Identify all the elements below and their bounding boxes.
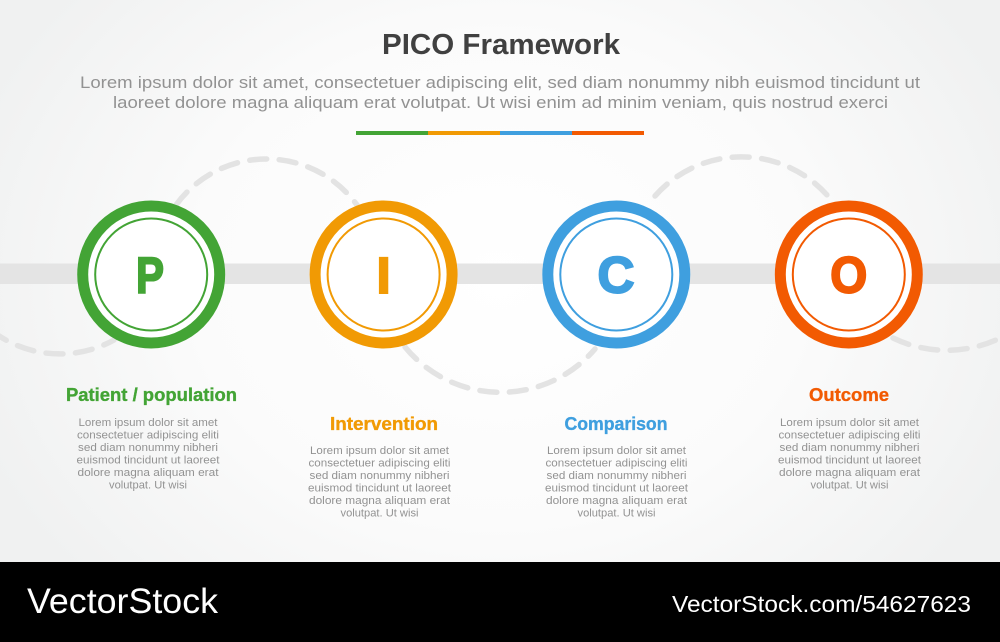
heading: Comparison: Comparison [564, 414, 668, 434]
footer image id: VectorStock.com/54627623 [672, 591, 971, 617]
text block: patient: sed diam nonummy nibheri [78, 442, 218, 454]
text block: comparison: consectetuer adipiscing eliti [546, 458, 688, 470]
text block: intervention [308, 445, 451, 520]
heading: Outcome: Outcome [809, 385, 889, 405]
four-colour divider [356, 131, 644, 135]
node: P: P [136, 247, 164, 304]
subtitle text [80, 73, 920, 112]
title: PICO Framework [382, 29, 621, 61]
text block: comparison: euismod tincidunt ut laoreet [545, 482, 688, 494]
text block: intervention: euismod tincidunt ut laoreet [308, 482, 451, 494]
text block: outcome [778, 417, 921, 492]
dashed connector arcs [0, 157, 1000, 392]
node: I [310, 200, 458, 348]
subtitle text: Lorem ipsum dolor sit amet, consectetuer adipiscing elit, sed diam nonummy nibh euismod tincidunt ut [80, 73, 920, 92]
timeline band [0, 264, 1000, 284]
text block: intervention: consectetuer adipiscing eliti [308, 458, 450, 470]
heading: Intervention: Intervention [330, 414, 438, 434]
text block: patient: volutpat. Ut wisi [109, 480, 187, 492]
text block: patient: consectetuer adipiscing eliti [77, 430, 219, 442]
text block: comparison: Lorem ipsum dolor sit amet [547, 445, 686, 457]
text block: intervention: Lorem ipsum dolor sit amet [310, 445, 449, 457]
text block: comparison: volutpat. Ut wisi [578, 508, 656, 520]
text block: patient: dolore magna aliquam erat [78, 467, 218, 479]
text block: outcome: dolore magna aliquam erat [779, 467, 920, 479]
text block: outcome: consectetuer adipiscing eliti [778, 430, 920, 442]
text block: intervention: sed diam nonummy nibheri [310, 470, 450, 482]
node: O: O [830, 246, 867, 304]
text block: patient [76, 417, 220, 492]
footer logo text: VectorStock [27, 582, 219, 621]
text block: intervention: dolore magna aliquam erat [309, 495, 450, 507]
text block: patient: euismod tincidunt ut laoreet [76, 454, 220, 466]
text block: outcome: euismod tincidunt ut laoreet [778, 454, 921, 466]
footer bar [0, 562, 1000, 642]
text block: patient: Lorem ipsum dolor sit amet [78, 417, 218, 429]
text block: comparison: dolore magna aliquam erat [546, 495, 687, 507]
node: P [77, 200, 225, 348]
text block: outcome: sed diam nonummy nibheri [780, 442, 920, 454]
text block: intervention: volutpat. Ut wisi [340, 508, 418, 520]
subtitle text: laoreet dolore magna aliquam erat volutpat. Ut wisi enim ad minim veniam, quis nostrud exerci [113, 93, 888, 112]
node: C: C [598, 246, 634, 304]
text block: comparison: sed diam nonummy nibheri [546, 470, 686, 482]
text block: outcome: volutpat. Ut wisi [810, 480, 888, 492]
node: C [542, 200, 690, 348]
text block: outcome: Lorem ipsum dolor sit amet [780, 417, 919, 429]
node: O [775, 200, 923, 348]
node: I: I [377, 247, 391, 304]
text block: comparison [545, 445, 688, 520]
heading: Patient / population: Patient / population [66, 385, 237, 405]
